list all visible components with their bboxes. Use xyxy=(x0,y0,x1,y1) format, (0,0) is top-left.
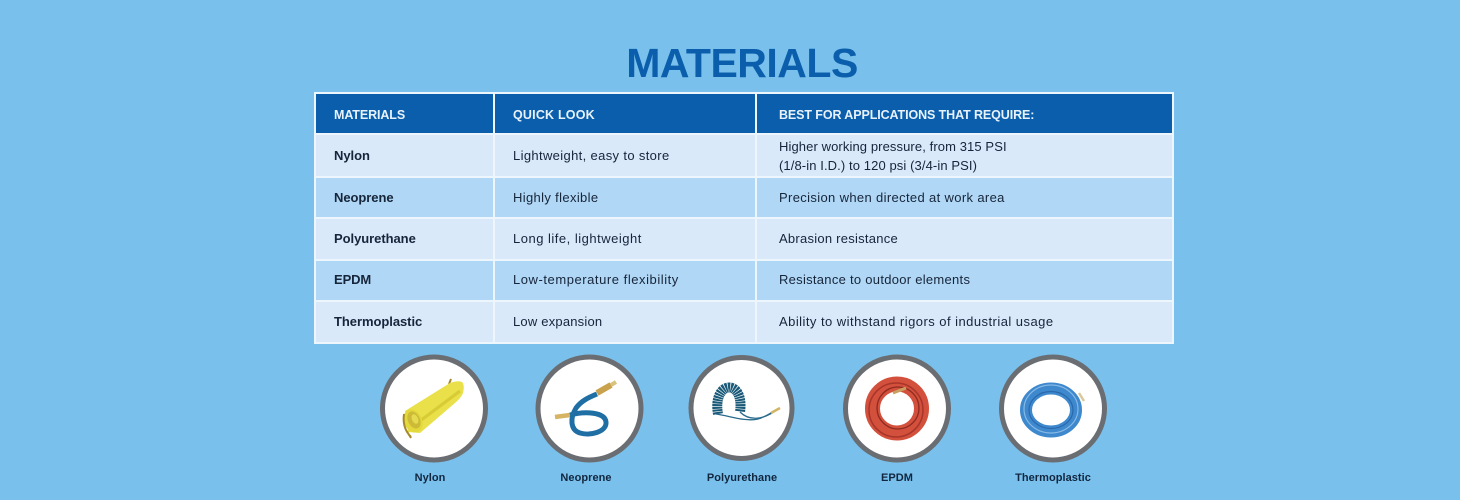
row: Thermoplastic: Ability to withstand rigors of industrial usage xyxy=(779,314,1054,329)
row: Nylon: (1/8-in I.D.) to 120 psi (3/4-in PSI) xyxy=(779,158,977,172)
title: MATERIALS xyxy=(626,40,858,86)
row: Nylon: Higher working pressure, from 315 PSI xyxy=(779,139,1007,154)
caption: Nylon: Nylon xyxy=(415,472,445,484)
table header row xyxy=(316,94,1172,133)
icon: EPDM red coiled hose xyxy=(846,357,948,460)
row: EPDM: Low-temperature flexibility xyxy=(513,272,679,287)
table header row: QUICK LOOK xyxy=(513,108,595,122)
row: Polyurethane: Polyurethane xyxy=(334,231,416,246)
row: EPDM: Resistance to outdoor elements xyxy=(779,272,970,287)
icon: polyurethane coiled hose xyxy=(691,358,792,458)
row: Polyurethane: Abrasion resistance xyxy=(779,231,898,246)
row: EPDM: EPDM xyxy=(334,272,371,287)
row: Polyurethane: Long life, lightweight xyxy=(513,231,642,246)
caption: Polyurethane: Polyurethane xyxy=(707,472,777,484)
row: Nylon: Nylon xyxy=(334,148,370,163)
table header row: BEST FOR APPLICATIONS THAT REQUIRE: xyxy=(779,108,1034,122)
row: EPDM xyxy=(316,261,1172,300)
row: Thermoplastic: Low expansion xyxy=(513,314,602,329)
icon: nylon yellow coiled hose xyxy=(382,357,486,460)
caption: Neoprene: Neoprene xyxy=(560,472,612,484)
caption: EPDM: EPDM xyxy=(881,472,913,484)
row: Neoprene: Precision when directed at work area xyxy=(779,190,1005,205)
row: Nylon: Lightweight, easy to store xyxy=(513,148,670,163)
materials table xyxy=(314,92,1174,344)
row: Polyurethane xyxy=(316,219,1172,259)
row: Neoprene: Highly flexible xyxy=(513,190,598,205)
row: Neoprene: Neoprene xyxy=(334,190,394,205)
caption: Thermoplastic: Thermoplastic xyxy=(1015,472,1091,484)
icon: thermoplastic blue coiled hose xyxy=(1002,357,1104,460)
icon: neoprene blue hose xyxy=(538,357,641,460)
row: Nylon xyxy=(316,135,1172,176)
table header row: MATERIALS xyxy=(334,108,405,122)
row: Thermoplastic: Thermoplastic xyxy=(334,314,422,329)
row: Thermoplastic xyxy=(316,302,1172,342)
row: Neoprene xyxy=(316,178,1172,217)
